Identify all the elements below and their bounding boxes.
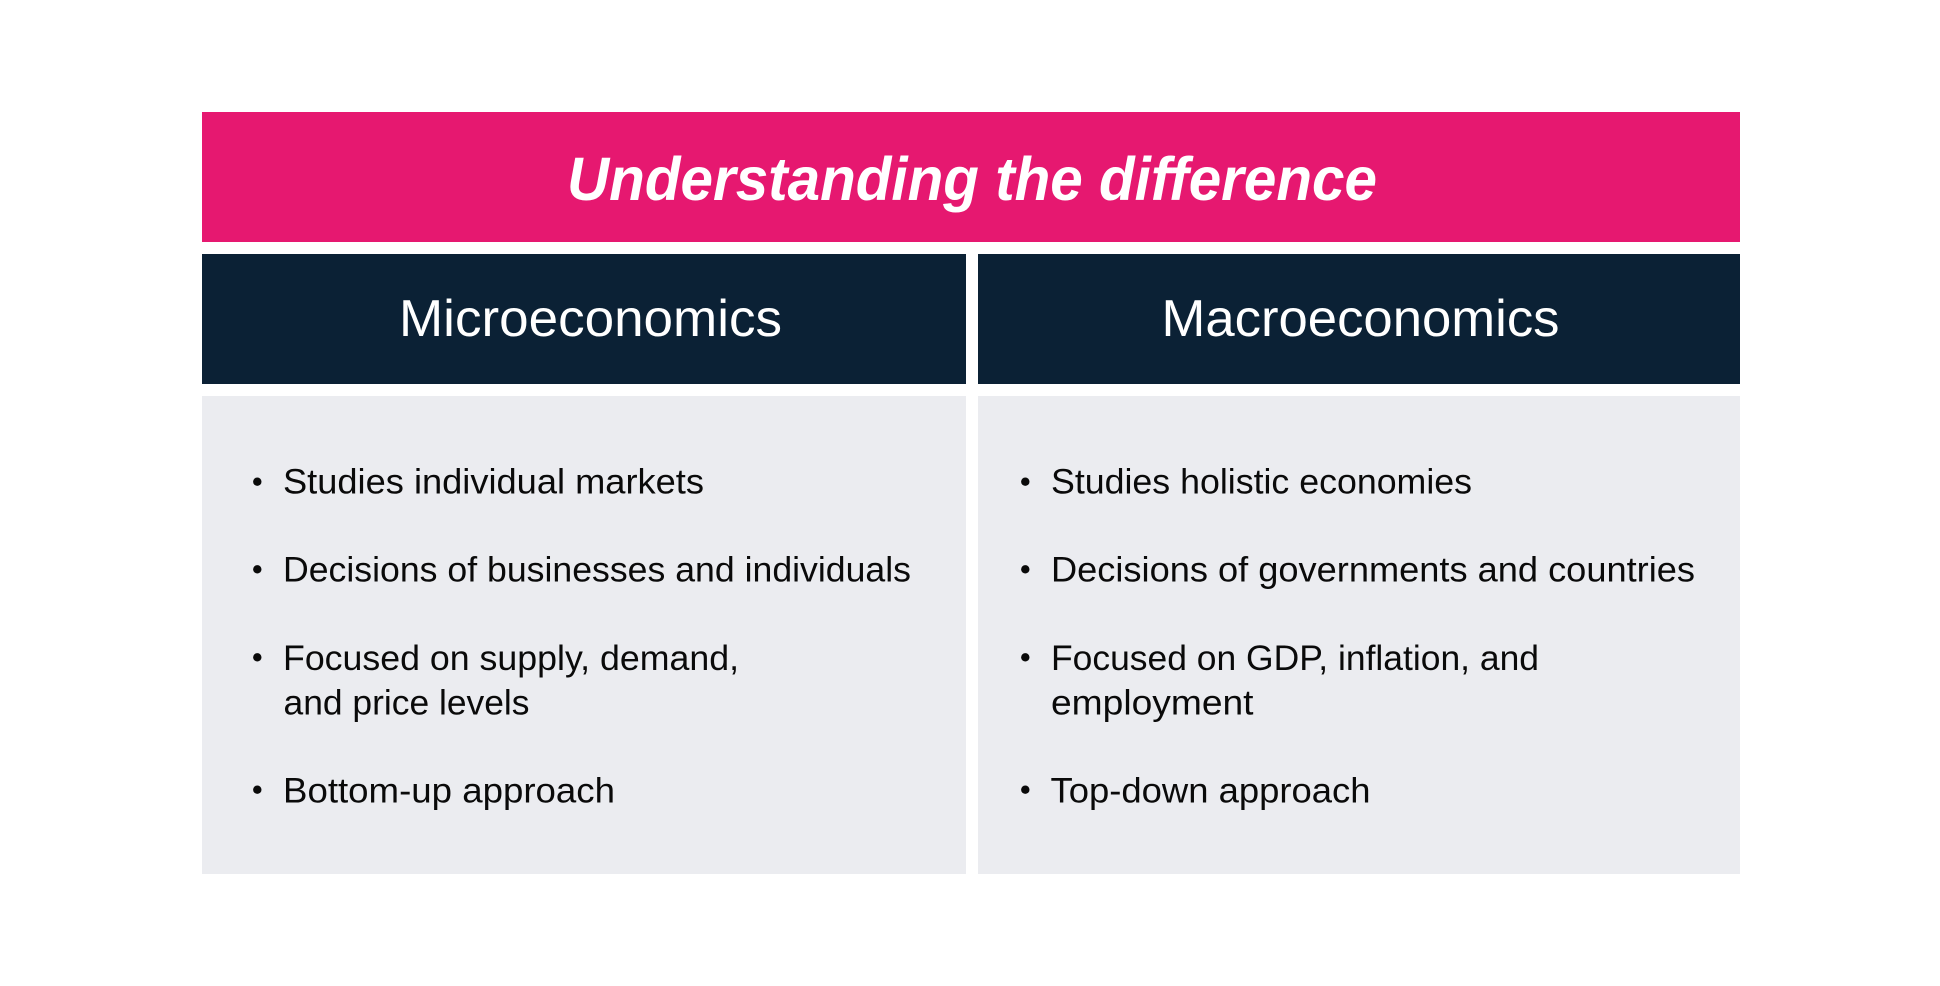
bullet: GDP, inflation, employment: employment xyxy=(1051,684,1254,722)
bullet: GDP, inflation, employment: Focused on GDP, inflation, and xyxy=(1051,639,1539,678)
heading: Microeconomics: Microeconomics xyxy=(399,289,782,347)
heading: Macroeconomics xyxy=(978,254,1740,384)
bullet: individual markets: Studies individual markets xyxy=(283,462,704,502)
bullet: supply, demand, price levels: and price levels xyxy=(284,684,530,722)
bullet: bottom-up approach: Bottom-up approach xyxy=(283,771,615,810)
bullet: GDP, inflation, employment xyxy=(1021,639,1539,722)
bullet: holistic economies: Studies holistic economies xyxy=(1051,462,1472,502)
bullet: supply, demand, price levels xyxy=(253,639,739,722)
heading: Macroeconomics: Macroeconomics xyxy=(1162,289,1560,347)
bullet: supply, demand, price levels: Focused on supply, demand, xyxy=(283,639,739,678)
title banner xyxy=(202,112,1740,242)
bullet: businesses and individuals: Decisions of businesses and individuals xyxy=(283,550,911,590)
bullet: top-down approach: Top-down approach xyxy=(1050,771,1370,810)
title: Understanding the difference xyxy=(567,145,1377,213)
bullet: governments and countries: Decisions of governments and countries xyxy=(1051,550,1695,590)
panel: microeconomics list xyxy=(202,396,966,874)
panel: macroeconomics list xyxy=(978,396,1740,874)
heading: Microeconomics xyxy=(202,254,966,384)
